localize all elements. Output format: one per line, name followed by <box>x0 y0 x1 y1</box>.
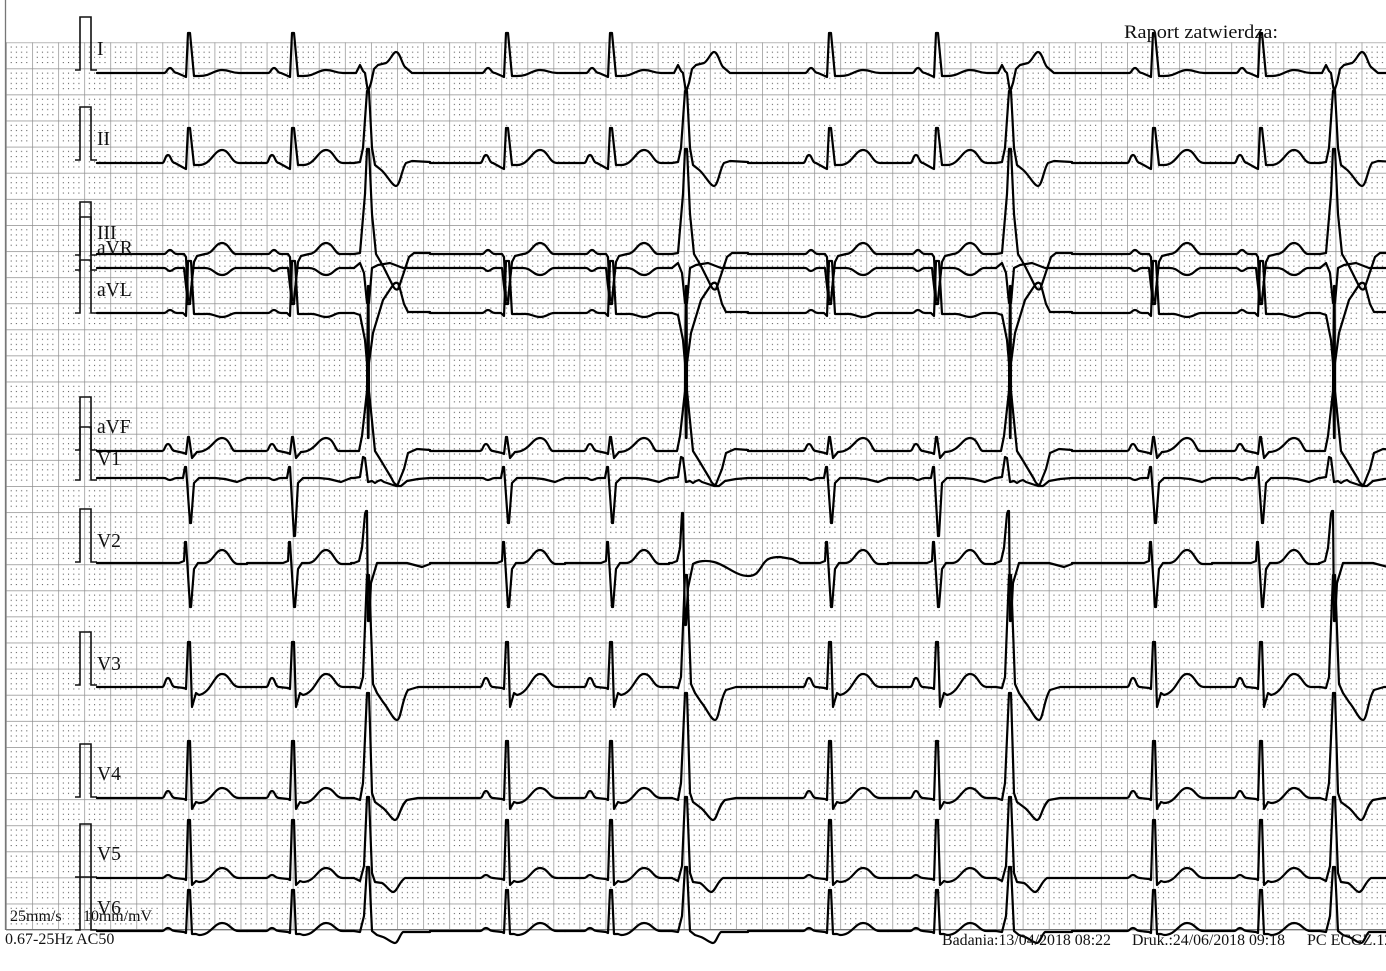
trace: lead III <box>97 149 1386 300</box>
print date: Druk.:24/06/2018 09:18 <box>1132 932 1285 949</box>
trace: lead V2 <box>97 511 1386 625</box>
trace: lead II <box>97 91 1386 186</box>
trace: lead V5 <box>97 797 1386 892</box>
calibration pulses <box>75 17 97 930</box>
trace: lead V1 <box>97 457 1386 536</box>
lead labels: aVR <box>97 238 133 259</box>
lead labels: V1 <box>97 449 121 470</box>
gain: 10mm/mV <box>83 908 152 925</box>
lead labels: I <box>97 39 104 60</box>
paper speed: 25mm/s <box>10 908 62 925</box>
lead labels: aVF <box>97 417 131 438</box>
lead labels: V4 <box>97 764 121 785</box>
lead labels <box>97 39 133 919</box>
exam date: Badania:13/04/2018 08:22 <box>942 932 1111 949</box>
lead labels: III <box>97 223 116 244</box>
trace: lead V3 <box>97 575 1386 720</box>
lead labels: V6 <box>97 898 121 919</box>
lead labels: II <box>97 129 110 150</box>
trace: lead I <box>97 33 1386 92</box>
trace: lead aVL <box>97 261 1386 438</box>
lead labels: V2 <box>97 531 121 552</box>
trace: lead V4 <box>97 693 1386 820</box>
filter settings: 0.67-25Hz AC50 <box>5 931 114 948</box>
trace: lead aVF <box>97 286 1386 485</box>
lead labels: aVL <box>97 280 132 301</box>
report approval text: Raport zatwierdza: <box>1124 22 1278 43</box>
trace: lead aVR <box>97 263 1386 304</box>
trace: lead V6 <box>97 867 1386 943</box>
lead labels: V3 <box>97 654 121 675</box>
lead labels: V5 <box>97 844 121 865</box>
